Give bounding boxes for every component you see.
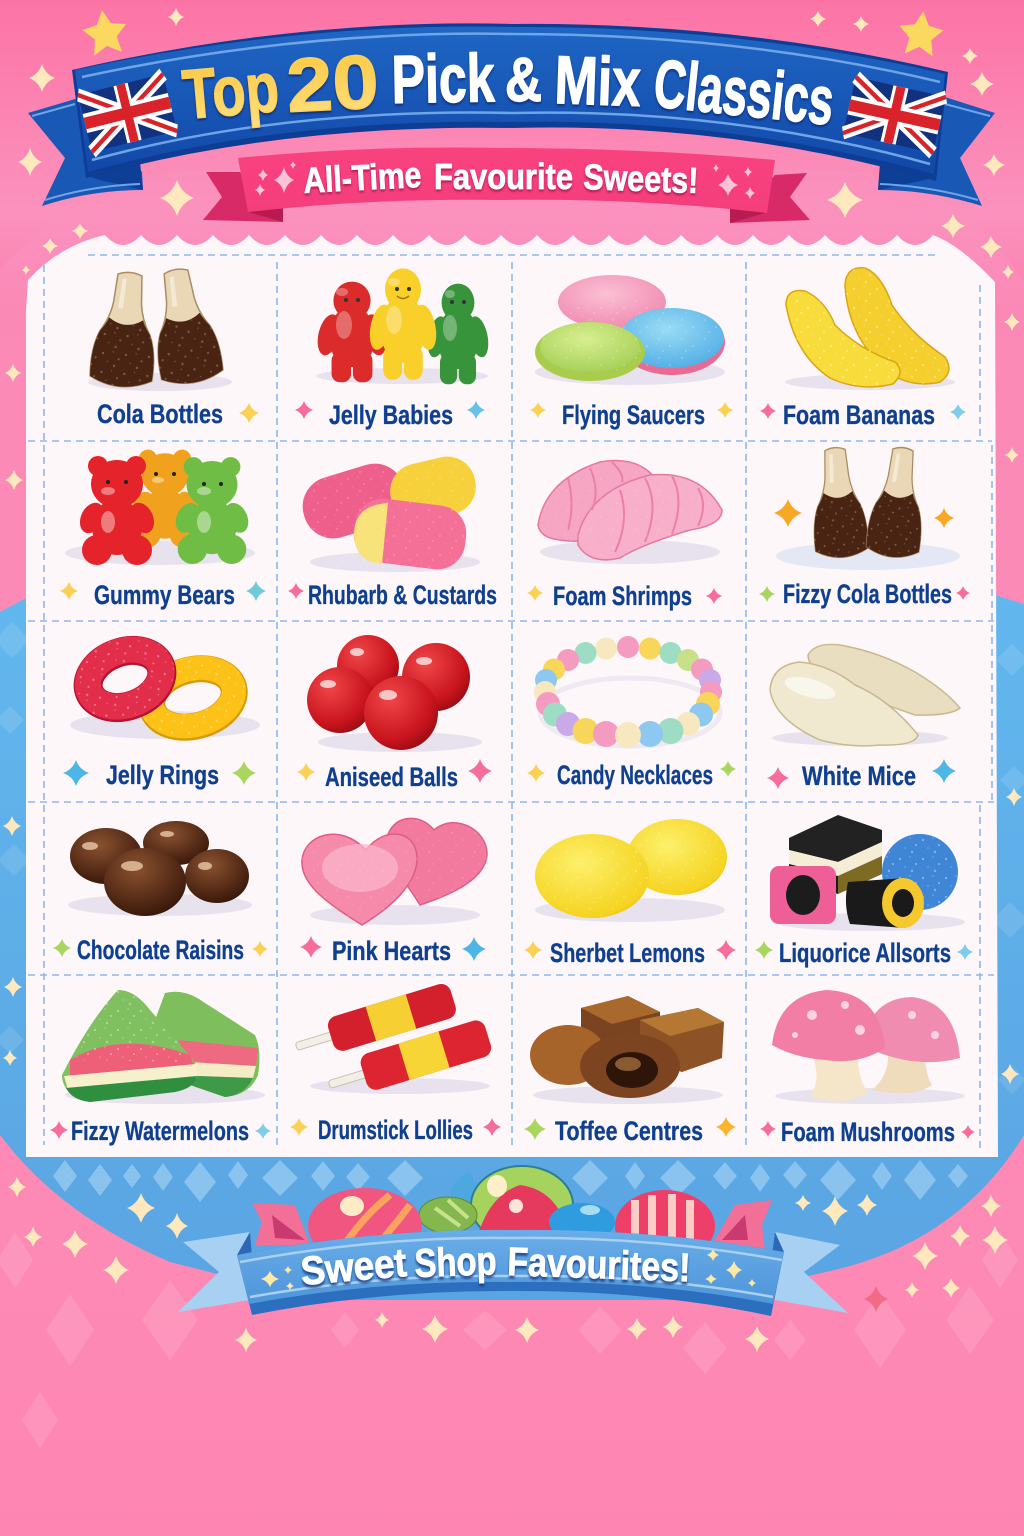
subtitle text xyxy=(302,154,699,201)
label: Foam Bananas: Foam Bananas xyxy=(783,400,935,430)
cell: Sherbet Lemons xyxy=(524,819,736,968)
label: Drumstick Lollies: Drumstick Lollies xyxy=(318,1115,473,1145)
icon: white mice xyxy=(770,644,960,746)
cell: Toffee Centres xyxy=(524,996,736,1146)
icon: flying saucers xyxy=(535,275,725,385)
icon: fizzy cola bottles xyxy=(774,445,960,570)
subtitle text: All-Time xyxy=(302,154,422,201)
label: Chocolate Raisins: Chocolate Raisins xyxy=(77,935,244,965)
icon: foam shrimps xyxy=(538,458,723,564)
cell: White Mice xyxy=(767,644,960,791)
title text xyxy=(180,39,837,140)
label: Rhubarb & Custards: Rhubarb & Custards xyxy=(308,580,497,610)
icon: drumstick lollies xyxy=(291,981,494,1103)
icon: foam mushrooms xyxy=(772,990,965,1104)
footer text: Shop xyxy=(414,1239,497,1286)
title text: Classics xyxy=(650,45,837,140)
label: Liquorice Allsorts: Liquorice Allsorts xyxy=(779,938,951,968)
flag: left union jack xyxy=(78,74,177,152)
title text: Mix xyxy=(553,42,642,121)
icon: jelly rings xyxy=(70,640,260,739)
cell: Drumstick Lollies xyxy=(290,981,501,1145)
icon: toffee centres xyxy=(530,996,724,1104)
icon: aniseed balls xyxy=(307,635,482,752)
cell: Aniseed Balls xyxy=(297,635,492,792)
label: Sherbet Lemons: Sherbet Lemons xyxy=(550,938,705,968)
title text: Pick xyxy=(391,40,495,118)
label: Aniseed Balls: Aniseed Balls xyxy=(325,762,458,792)
cell: Jelly Rings xyxy=(63,640,260,790)
panel: sweets grid xyxy=(26,235,998,1157)
cell: Foam Bananas xyxy=(760,268,966,430)
icon: gummy bears xyxy=(65,450,255,565)
label: Foam Shrimps: Foam Shrimps xyxy=(553,581,692,611)
label: Flying Saucers: Flying Saucers xyxy=(562,400,705,430)
subtitle text: Sweets! xyxy=(583,156,699,201)
label: Candy Necklaces: Candy Necklaces xyxy=(557,760,713,790)
cell: Foam Mushrooms xyxy=(760,990,975,1147)
cell: Pink Hearts xyxy=(300,816,490,966)
banner: bottom ribbon xyxy=(178,1230,848,1316)
cell: Gummy Bears xyxy=(60,450,266,610)
icon: candy necklace xyxy=(534,636,722,748)
cell: Fizzy Watermelons xyxy=(50,990,271,1146)
subtitle text: Favourite xyxy=(434,156,573,197)
label: Foam Mushrooms: Foam Mushrooms xyxy=(781,1117,955,1147)
cell: Jelly Babies xyxy=(295,268,492,430)
label: White Mice: White Mice xyxy=(802,761,916,791)
ribbon tails xyxy=(28,97,995,206)
label: Toffee Centres: Toffee Centres xyxy=(555,1116,703,1146)
label: Gummy Bears: Gummy Bears xyxy=(94,580,235,610)
cell: Fizzy Cola Bottles xyxy=(759,445,970,609)
label: Jelly Rings: Jelly Rings xyxy=(106,760,219,790)
icon: sherbet lemons xyxy=(535,819,727,922)
icon: cola bottles xyxy=(88,265,232,391)
cell: Rhubarb & Custards xyxy=(288,451,497,610)
flag: right union jack xyxy=(843,77,946,153)
cell: Foam Shrimps xyxy=(527,458,723,611)
cell: Liquorice Allsorts xyxy=(755,815,973,968)
icon: rhubarb and custards xyxy=(295,451,481,573)
banner: pink subtitle ribbon xyxy=(203,147,810,223)
footer text: Sweet xyxy=(299,1241,408,1294)
icon: liquorice allsorts xyxy=(770,815,965,931)
title text: 20 xyxy=(284,39,381,129)
label: Cola Bottles: Cola Bottles xyxy=(97,399,223,429)
footer text xyxy=(299,1239,691,1294)
banner: main blue title ribbon xyxy=(28,23,995,206)
icon: foam bananas xyxy=(785,268,955,390)
icon: chocolate raisins xyxy=(68,821,252,916)
label: Jelly Babies: Jelly Babies xyxy=(329,400,453,430)
label: Fizzy Watermelons: Fizzy Watermelons xyxy=(71,1116,249,1146)
cell: Flying Saucers xyxy=(530,275,733,430)
illustration: candies above bottom banner xyxy=(252,1166,772,1264)
cell: Candy Necklaces xyxy=(527,636,736,790)
title text: & xyxy=(505,46,542,115)
label: Pink Hearts: Pink Hearts xyxy=(332,936,451,966)
icon: jelly babies xyxy=(314,268,492,384)
cell: Cola Bottles xyxy=(88,265,259,429)
title text: Top xyxy=(180,48,282,134)
footer text: Favourites! xyxy=(507,1240,691,1290)
label: Fizzy Cola Bottles: Fizzy Cola Bottles xyxy=(783,579,952,609)
icon: fizzy watermelons xyxy=(62,990,265,1104)
cell: Chocolate Raisins xyxy=(53,821,268,965)
icon: pink hearts xyxy=(302,816,490,926)
